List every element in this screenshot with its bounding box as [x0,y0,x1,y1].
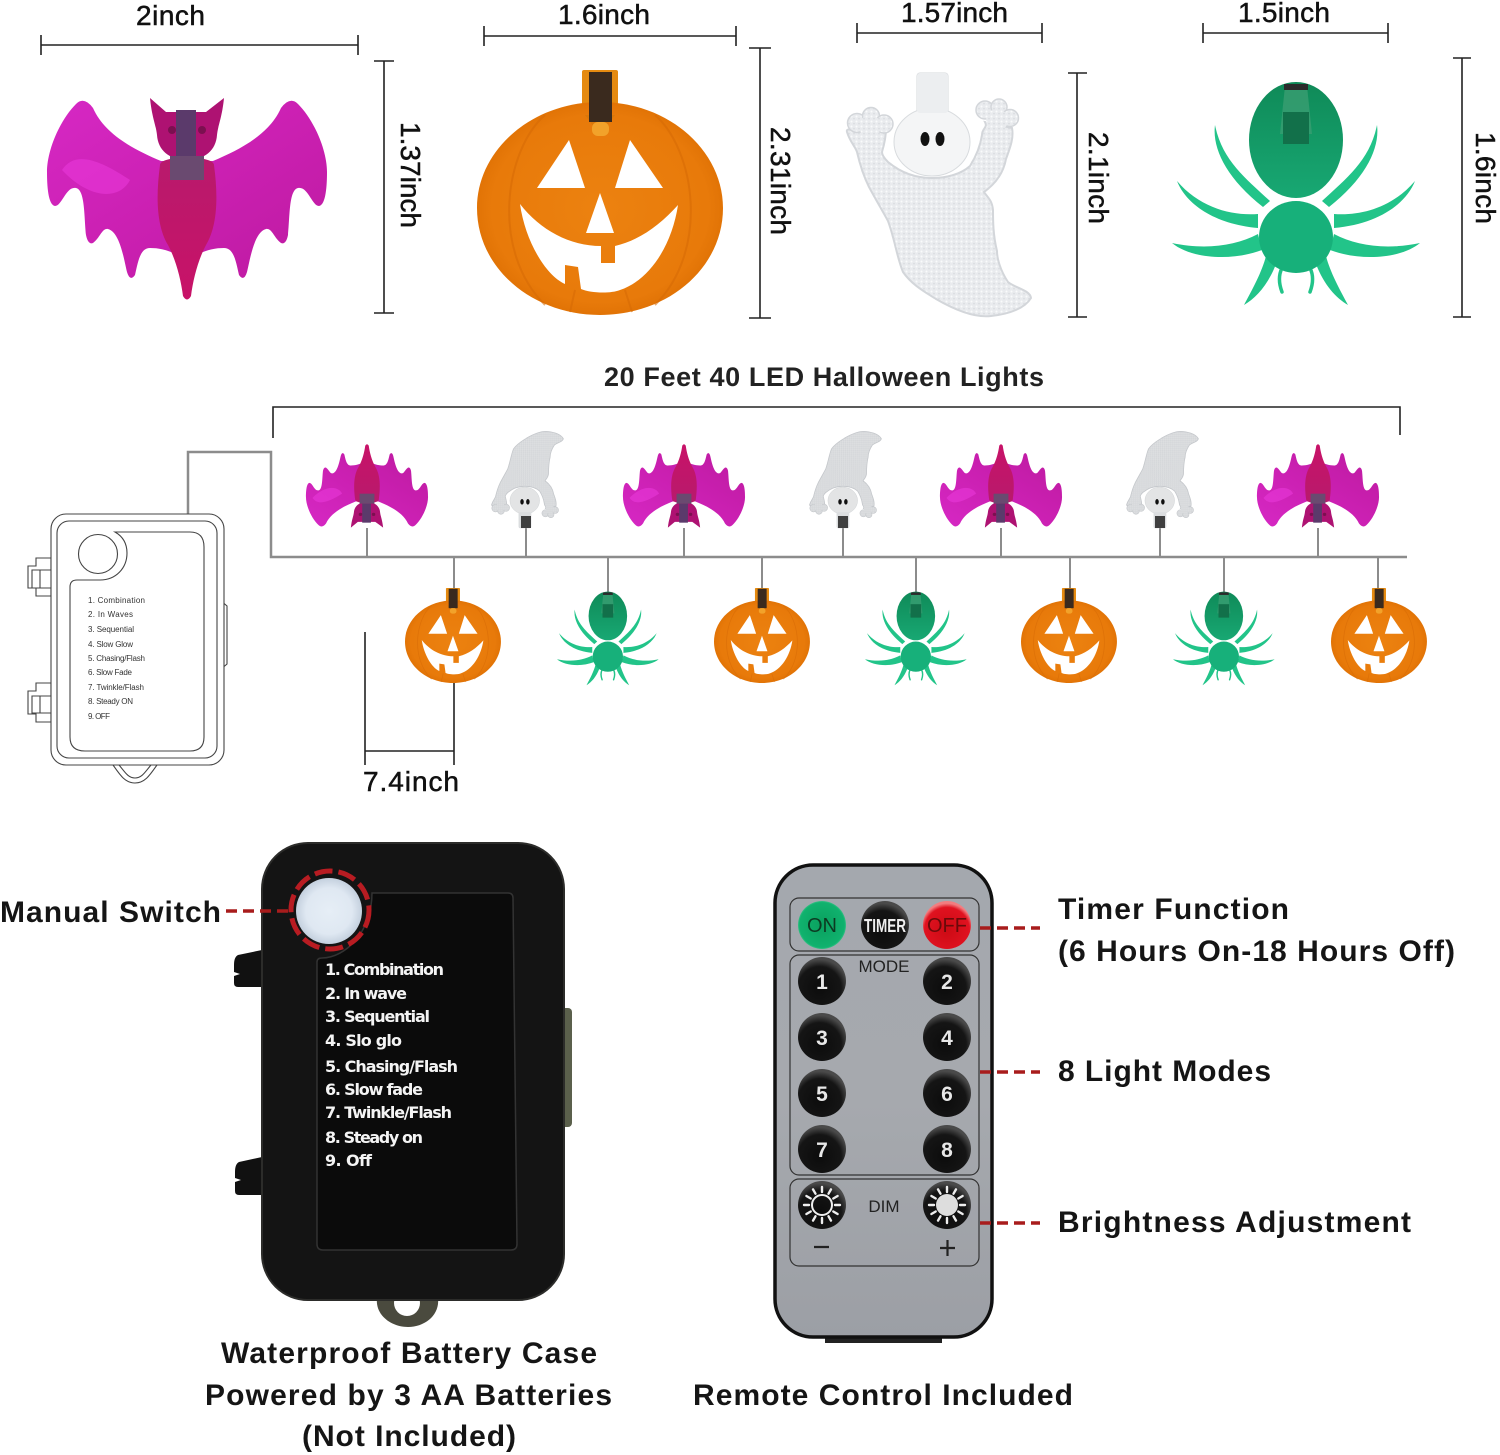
printed mode list: 8. Steady on [325,1128,423,1147]
mode list on outline: 9. OFF [88,712,110,721]
timer detail: (6 Hours On-18 Hours Off) [1058,935,1455,968]
modes leader [980,1070,1040,1074]
spider light 1 [557,592,659,685]
pumpkin height dimension line [749,48,771,318]
printed mode list: 6. Slow fade [325,1080,423,1099]
ghost width dimension line [857,23,1042,43]
remote control caption: Remote Control Included [693,1379,1073,1412]
icon: pink bat [47,98,327,300]
spider width dimension line [1203,23,1388,43]
hanging lights upper row [306,431,1379,528]
mode list on outline: 6. Slow Fade [88,668,133,677]
pumpkin light 2 [714,588,810,683]
mode button group [790,955,979,1175]
string length bracket [273,407,1400,438]
remote control [775,865,992,1343]
top button group [790,898,979,951]
manual switch button [296,878,362,944]
printed mode list: 5. Chasing/Flash [325,1057,458,1076]
top button group: OFF [927,915,967,937]
spider light 2 [865,592,967,685]
spacing label: 7.4inch [363,766,459,797]
ghost light 2 [810,431,881,528]
pumpkin light 4 [1331,588,1427,683]
mode button group: 2 [941,971,953,994]
bat height label: 1.37inch [395,122,426,228]
printed mode list [325,960,458,1170]
timer button [861,901,909,949]
mode button group: MODE [858,957,910,976]
pumpkin width dimension line [484,26,736,46]
mode button group: 4 [941,1027,953,1050]
bat width dimension line [41,35,358,55]
waterproof battery case photo [234,843,572,1327]
bat light 1 [306,444,428,528]
label panel [317,893,517,1250]
battery case caption [205,1337,612,1453]
printed mode list: 3. Sequential [325,1007,430,1026]
bat light 2 [623,444,745,528]
mode list on outline: 3. Sequential [88,625,134,634]
string wire [188,452,1407,594]
printed mode list: 9. Off [325,1151,373,1170]
pumpkin light with size dimensions [477,0,796,318]
mode list on outline: 1. Combination [88,596,145,605]
pumpkin light 3 [1021,588,1117,683]
battery case caption: Powered by 3 AA Batteries [205,1379,612,1412]
string length heading: 20 Feet 40 LED Halloween Lights [604,362,1044,392]
printed mode list: 2. In wave [325,984,407,1003]
case clips and tab [234,950,572,1327]
icon: white ghost [847,73,1031,316]
timer function callout [980,893,1455,968]
ghost light 1 [492,431,563,528]
spider height dimension line [1453,58,1471,317]
mode list on outline: 4. Slow Glow [88,640,133,649]
spacing dimension lines [365,632,454,765]
mode button group: 3 [816,1027,828,1050]
mode button group: 7 [816,1139,828,1162]
printed mode list: 7. Twinkle/Flash [325,1103,452,1122]
icon: green spider [1172,82,1420,305]
manual switch leader [226,909,289,913]
ghost light with size dimensions [847,0,1114,317]
brightness label: Brightness Adjustment [1058,1206,1411,1239]
battery case outline drawing [28,514,227,783]
hanging lights lower row [405,588,1427,685]
battery case caption: (Not Included) [302,1420,516,1453]
bat light 4 [1257,444,1379,528]
ghost height label: 2.1inch [1083,132,1114,224]
ghost height dimension line [1068,73,1087,317]
mode list on outline: 8. Steady ON [88,697,133,706]
modes label: 8 Light Modes [1058,1055,1271,1088]
on button [798,901,846,949]
spider light 3 [1173,592,1275,685]
bat width label: 2inch [136,0,205,31]
case body [262,843,564,1300]
mode list on outline [88,596,145,721]
manual switch label: Manual Switch [0,896,221,929]
printed mode list: 1. Combination [325,960,444,979]
bat light 3 [940,444,1062,528]
mode button group: 8 [941,1139,953,1162]
mode button group: 5 [816,1083,828,1106]
mode button group: 1 [816,971,828,994]
pumpkin height label: 2.31inch [765,127,796,235]
remote base connector [825,1338,942,1343]
spider light with size dimensions [1172,0,1500,317]
printed mode list: 4. Slo glo [325,1031,402,1050]
brightness leader [980,1221,1040,1225]
pumpkin light 1 [405,588,501,683]
icon: orange pumpkin [477,70,723,315]
mode list on outline: 5. Chasing/Flash [88,654,145,663]
red dashed highlight circle [291,871,369,949]
timer leader [980,926,1040,930]
off button [923,901,971,949]
remote body [775,865,992,1337]
mode list on outline: 7. Twinkle/Flash [88,683,144,692]
spacing dimension [363,632,459,797]
dim button group: DIM [868,1197,900,1216]
dim button group [790,1179,979,1266]
bat light with size dimensions [41,0,426,313]
mode button group: 6 [941,1083,953,1106]
top button group: TIMER [864,916,906,936]
battery case caption: Waterproof Battery Case [221,1337,597,1370]
mode list on outline: 2. In Waves [88,610,133,619]
top button group: ON [807,915,837,937]
ghost light 3 [1127,431,1198,528]
bat height dimension line [374,61,394,313]
timer label: Timer Function [1058,893,1289,926]
outline body [28,514,227,783]
